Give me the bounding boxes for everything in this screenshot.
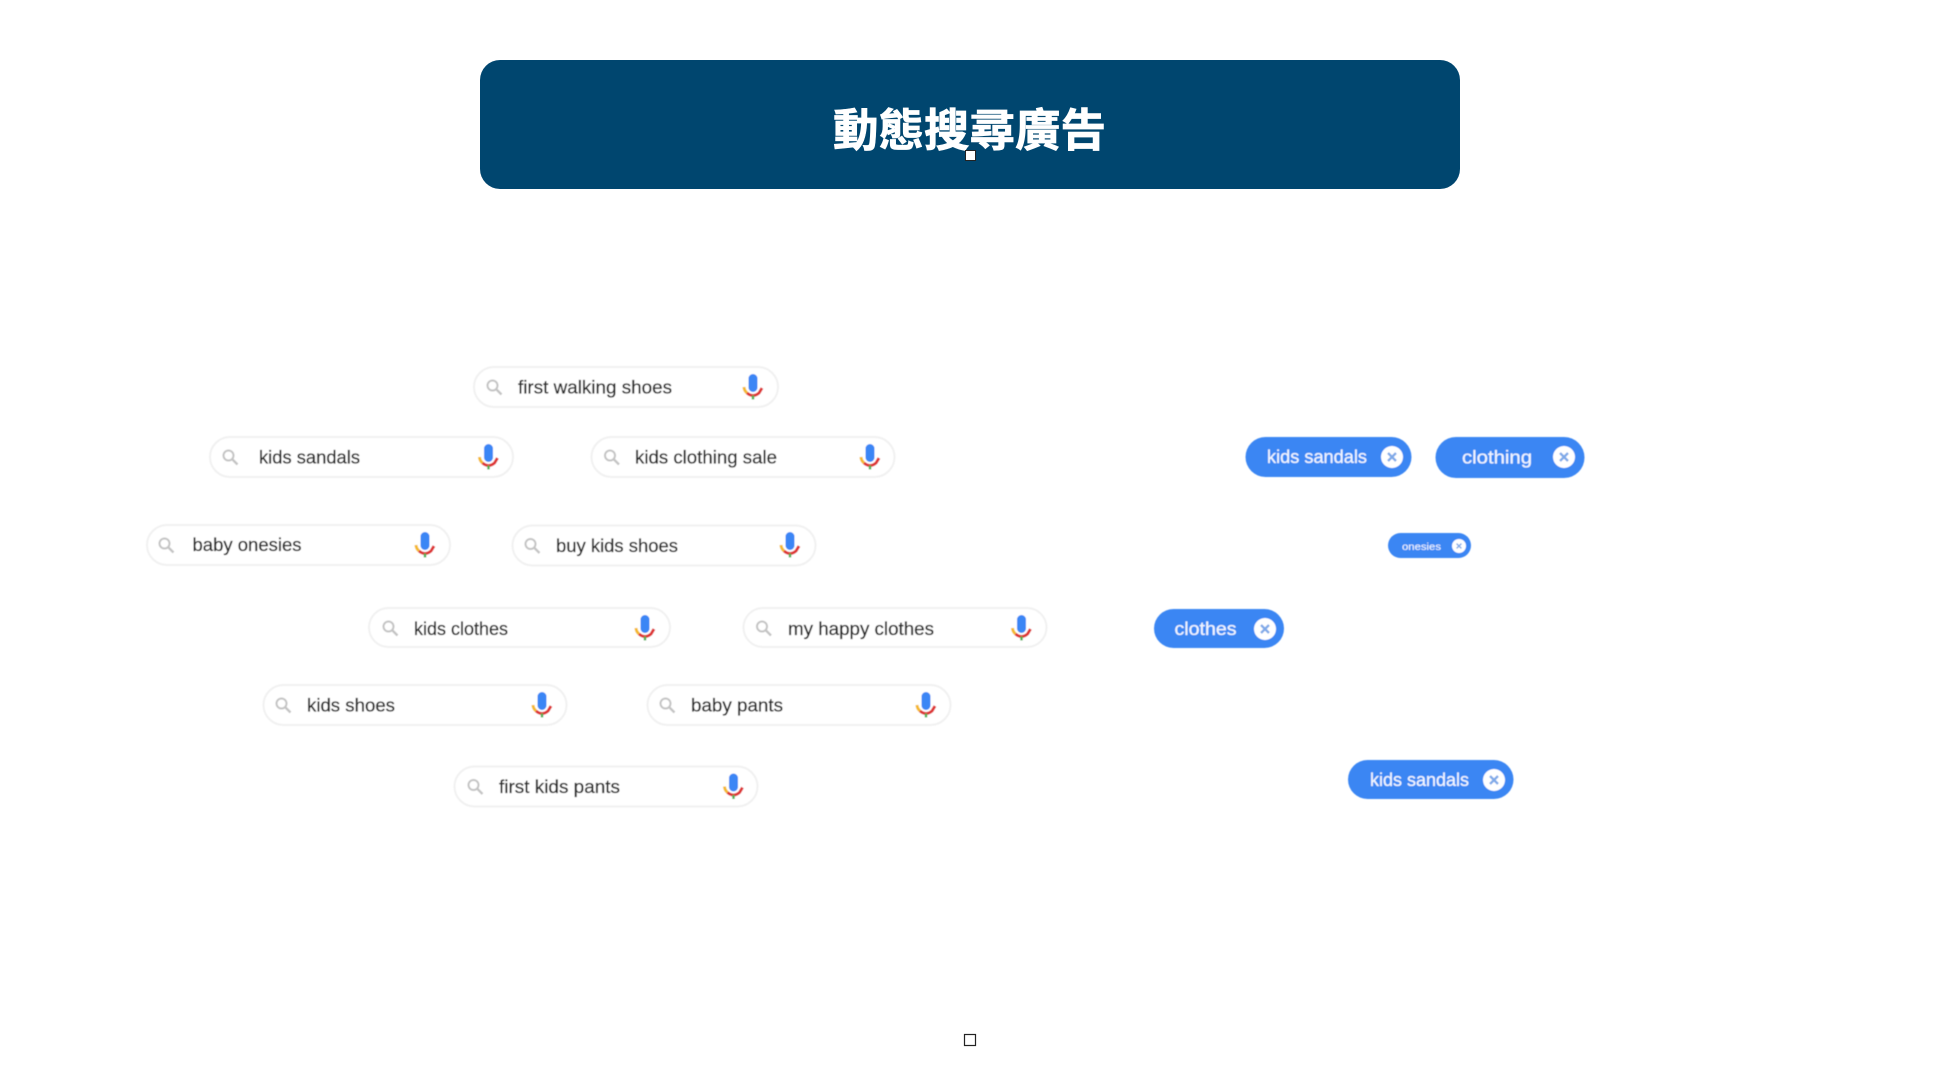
title text: 動態搜尋廣告 (833, 105, 1106, 156)
search bar: first kids pants: first kids pants (499, 777, 620, 797)
search bar: baby onesies (147, 525, 450, 565)
title banner (480, 60, 1460, 189)
search bar: baby pants (648, 685, 950, 725)
search bar: buy kids shoes: buy kids shoes (556, 536, 678, 556)
search bar: my happy clothes: my happy clothes (788, 619, 934, 639)
search bar: kids clothes (369, 608, 670, 647)
search bar: kids shoes (264, 685, 566, 725)
chip: clothing: clothing (1462, 448, 1532, 468)
chip: clothes: clothes (1174, 619, 1236, 639)
blue keyword chips group (1154, 437, 1584, 799)
chip: clothing (1436, 437, 1584, 478)
chip: kids sandals (1246, 437, 1412, 477)
chip: kids sandals lower (1348, 760, 1514, 799)
search bars group (147, 367, 1046, 806)
search bar: first walking shoes (474, 367, 778, 407)
search bar: baby pants: baby pants (691, 696, 783, 716)
search bar: kids sandals (210, 437, 513, 477)
small square handle top (966, 150, 976, 160)
chip: kids sandals lower: kids sandals (1370, 770, 1469, 790)
search bar: first walking shoes: first walking shoes (518, 378, 672, 398)
chip: onesies: onesies (1402, 542, 1441, 553)
search bar: baby onesies: baby onesies (192, 535, 302, 555)
chip: onesies (1388, 533, 1471, 558)
small square handle bottom (964, 1034, 976, 1046)
search bar: kids clothes: kids clothes (414, 619, 508, 639)
search bar: my happy clothes (744, 608, 1046, 647)
chip: kids sandals: kids sandals (1267, 447, 1367, 467)
search bar: kids shoes: kids shoes (307, 696, 395, 716)
search bar: kids sandals: kids sandals (259, 448, 360, 468)
search bar: kids clothing sale: kids clothing sale (635, 448, 777, 468)
search bar: kids clothing sale (592, 437, 894, 477)
chip: clothes (1154, 609, 1284, 648)
search bar: first kids pants (454, 766, 758, 806)
search bar: buy kids shoes (512, 526, 816, 566)
